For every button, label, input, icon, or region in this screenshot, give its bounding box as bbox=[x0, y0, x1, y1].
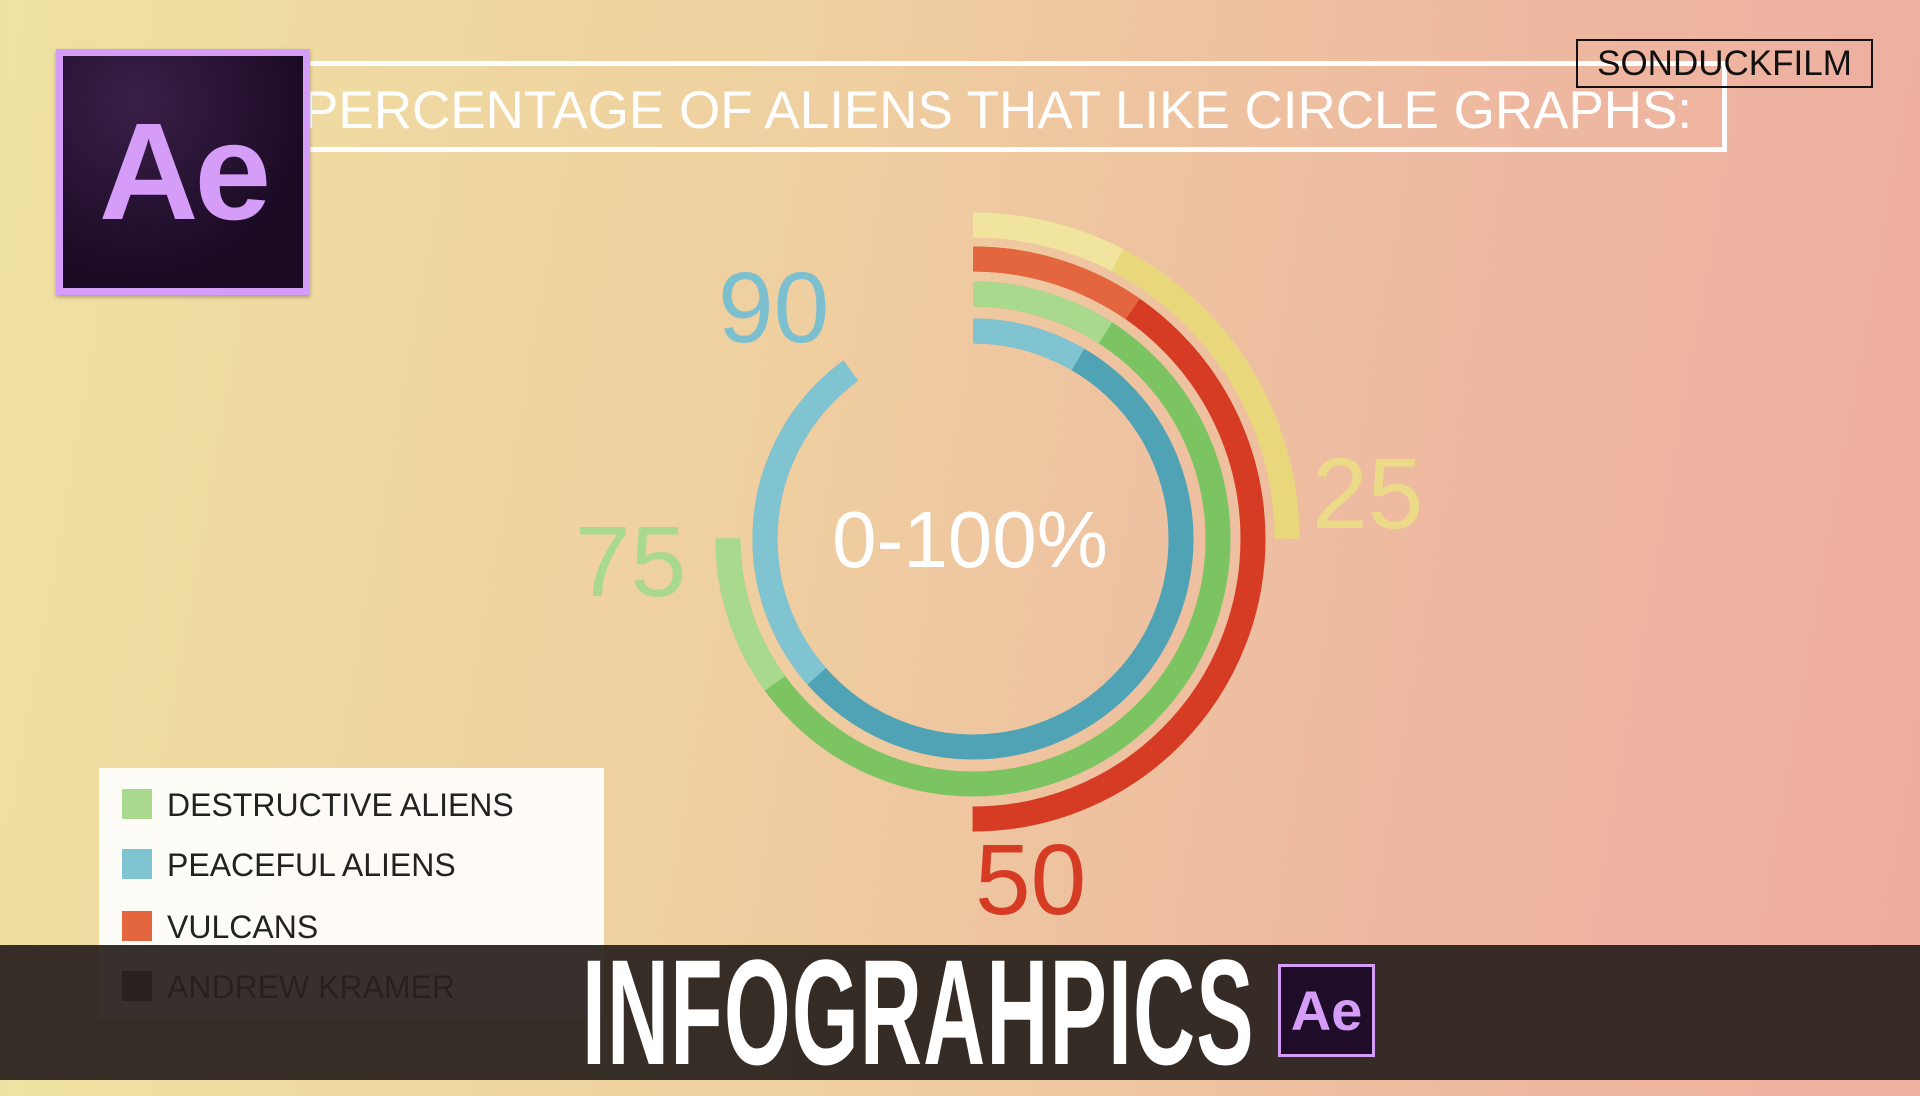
label 25: 25 bbox=[1312, 438, 1423, 550]
center label: 0-100% bbox=[832, 495, 1108, 584]
legend item: vulcans: VULCANS bbox=[167, 909, 318, 945]
title box: PERCENTAGE OF ALIENS THAT LIKE CIRCLE GRAPHS: bbox=[303, 81, 1692, 140]
legend item: destructive: DESTRUCTIVE ALIENS bbox=[167, 787, 514, 823]
bottom banner bbox=[0, 945, 1920, 1080]
banner title: INFOGRAHPICS bbox=[582, 928, 1255, 1096]
legend item: andrew kramer: ANDREW KRAMER bbox=[167, 969, 455, 1005]
icon: small Ae: Ae bbox=[1291, 979, 1362, 1042]
legend item: peaceful: PEACEFUL ALIENS bbox=[167, 847, 456, 883]
icon: Ae logo bbox=[56, 49, 310, 295]
icon: Ae logo: Ae bbox=[99, 95, 267, 249]
title box bbox=[300, 61, 1727, 152]
label 75: 75 bbox=[575, 506, 686, 618]
legend panel bbox=[99, 768, 604, 1019]
label 90: 90 bbox=[718, 252, 829, 364]
label 50: 50 bbox=[975, 824, 1086, 936]
logo: SONDUCKFILM: SONDUCKFILM bbox=[1597, 44, 1852, 83]
logo: SONDUCKFILM bbox=[1576, 39, 1873, 88]
icon: small Ae bbox=[1278, 964, 1375, 1057]
